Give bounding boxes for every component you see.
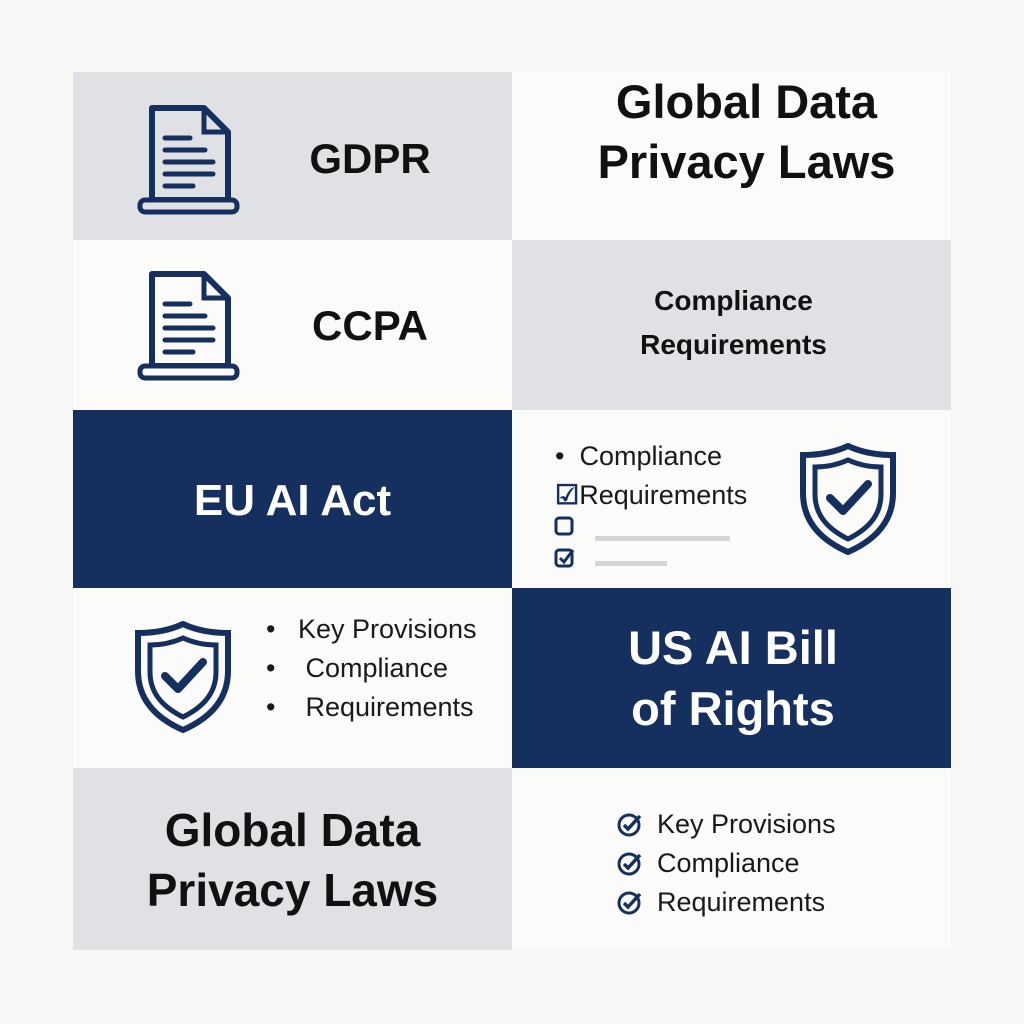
icon: document	[138, 271, 240, 380]
checklist placeholders	[554, 516, 730, 568]
heading: GDPR: GDPR	[309, 135, 431, 182]
icon: document	[138, 105, 240, 214]
panel: CCPA	[73, 240, 512, 410]
title	[512, 72, 951, 240]
panel: global data privacy laws	[73, 768, 512, 950]
panel: checklist	[512, 768, 951, 950]
list: • Requirements	[266, 692, 474, 722]
panel: global data privacy laws: Privacy Laws	[147, 864, 438, 916]
list	[555, 441, 747, 510]
panel: compliance requirements: Requirements	[640, 329, 827, 360]
check icons	[618, 814, 642, 914]
list: Compliance	[657, 848, 800, 878]
panel: checklist with shield	[512, 410, 951, 588]
title: Global Data	[616, 75, 877, 128]
title: Privacy Laws	[598, 135, 895, 188]
panel: shield key provisions	[73, 588, 512, 768]
panel: EU AI Act: EU AI Act	[194, 476, 391, 525]
list	[657, 809, 836, 917]
panel: global data privacy laws: Global Data	[165, 804, 420, 856]
list: Key Provisions	[657, 809, 836, 839]
panel: EU AI Act	[73, 410, 512, 588]
heading: CCPA: CCPA	[312, 302, 428, 349]
panel: US AI Bill of Rights	[512, 588, 951, 768]
list: • Key Provisions	[266, 614, 477, 644]
panel: GDPR	[73, 72, 512, 240]
icon: shield	[800, 443, 896, 555]
panel: US AI Bill of Rights: of Rights	[631, 682, 835, 735]
list	[266, 614, 477, 722]
panel: compliance requirements: Compliance	[654, 285, 813, 316]
list: • Compliance	[266, 653, 448, 683]
icon: shield	[135, 621, 231, 733]
panel: US AI Bill of Rights: US AI Bill	[628, 621, 838, 674]
panel: compliance requirements	[512, 240, 951, 410]
list: Requirements	[657, 887, 825, 917]
list: ☑Requirements	[555, 480, 747, 510]
list: • Compliance	[555, 441, 722, 471]
